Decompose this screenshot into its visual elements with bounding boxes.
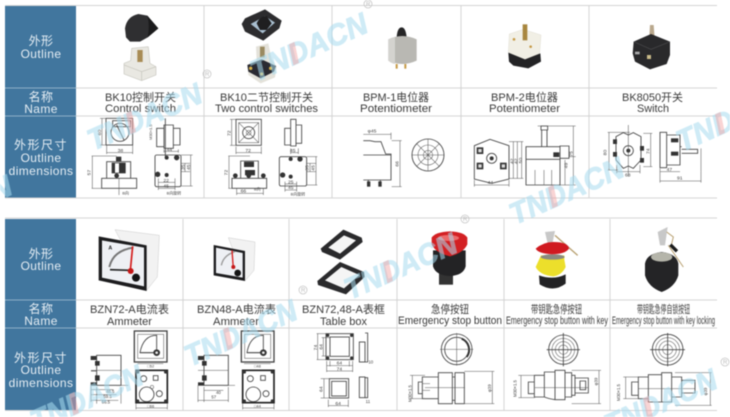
panel: top table	[5, 6, 717, 198]
photo: BK8050 switch	[633, 25, 670, 69]
drawing: BPM-1 potentiometer outline dimensions: 68	[625, 173, 631, 179]
drawing: BZN72-A ammeter outline dimensions: □44	[254, 403, 262, 408]
bottom table header column: 外形	[29, 247, 53, 261]
drawing: BPM-1 potentiometer outline dimensions: 91	[677, 175, 683, 181]
top table header column	[5, 6, 76, 198]
watermark: TNDACN: TNDACN	[245, 7, 374, 88]
watermark: TNDACN: TNDACN	[179, 294, 304, 373]
drawing: BZN72-A ammeter outline dimensions: 64	[318, 344, 324, 350]
registered marks: R	[723, 360, 728, 366]
photo: BZN72-A ammeter: A	[108, 246, 112, 252]
drawing: emergency stop button outline dimensions	[407, 333, 712, 405]
drawing: BK10 control switch outline dimensions: 72	[245, 148, 251, 154]
drawing: BZN72-A ammeter outline dimensions: 74	[313, 345, 319, 350]
top-left products and drawings	[87, 9, 317, 197]
bottom table product names: Ammeter	[213, 316, 259, 328]
photo: BPM-2 potentiometer	[508, 24, 541, 68]
bottom table header column: 名称	[29, 301, 53, 316]
drawing: emergency stop button outline dimensions: φ39	[594, 377, 599, 385]
drawing: BZN72-A ammeter outline dimensions: 48.5	[106, 389, 115, 394]
drawing: BPM-1 potentiometer outline dimensions: 49	[563, 163, 569, 168]
bottom table header column: Outline	[21, 259, 61, 273]
drawing: table box side views, right edge: 10	[368, 360, 374, 365]
top table product names: Potentiometer	[489, 103, 560, 115]
bottom table header column: dimensions	[9, 376, 73, 390]
drawing: BPM-1 potentiometer outline dimensions	[363, 125, 701, 187]
drawing: BK10 control switch outline dimensions: B向旋转	[167, 190, 181, 196]
drawing: BK10 control switch outline dimensions: 25	[288, 180, 294, 186]
drawing: BK10 control switch outline dimensions: 45	[290, 148, 296, 154]
drawing: BZN72-A ammeter outline dimensions: 64	[319, 386, 325, 392]
drawing: BK10 control switch outline dimensions: 22	[163, 178, 169, 184]
bottom table product names: BZN72,48-A表框	[302, 302, 385, 316]
drawing: BK10 control switch outline dimensions: 60	[97, 130, 103, 135]
bottom table product names: Emergency stop button	[398, 315, 502, 327]
top table product names: BK10控制开关	[105, 90, 176, 104]
photo: emergency stop button	[432, 231, 467, 285]
top-right products and drawings	[363, 24, 701, 187]
photo: BZN72-A ammeter	[99, 230, 159, 291]
drawing: BK10 control switch outline dimensions	[87, 118, 317, 197]
drawing: BK10 control switch outline dimensions: 45	[311, 165, 317, 171]
drawing: BZN72-A ammeter outline dimensions: 57	[211, 395, 217, 400]
drawing: BZN72-A ammeter outline dimensions: 64	[337, 361, 342, 367]
drawing: BK10 control switch outline dimensions: B向	[122, 190, 129, 196]
drawing: BZN72,48-A table box outline dimensions	[326, 334, 353, 360]
top table header column: 外形	[29, 34, 53, 48]
photo: emergency stop button with key	[536, 231, 578, 289]
drawing: BK10 control switch outline dimensions: 45	[163, 183, 169, 189]
bottom table product names: Table box	[320, 316, 367, 328]
drawing: BK10 control switch outline dimensions: 72	[227, 130, 233, 136]
bottom table product names: BZN72-A电流表	[90, 302, 169, 316]
watermark: TNDACN: TNDACN	[504, 151, 630, 231]
drawing: BK10 control switch outline dimensions: 66	[241, 189, 246, 195]
drawing: BPM-1 potentiometer outline dimensions: 66	[394, 161, 400, 167]
drawing: emergency stop button outline dimensions: M30×1.5	[407, 384, 412, 402]
top table product names: BK8050开关	[622, 90, 683, 104]
watermark: TNDACN: TNDACN	[82, 77, 208, 157]
drawing: BK10 control switch outline dimensions: 35	[180, 164, 186, 170]
bottom table product names: Emergency stop button with key	[506, 315, 608, 327]
drawing: BPM-1 potentiometer outline dimensions: 47	[667, 167, 672, 173]
drawing: BZN72-A ammeter outline dimensions: □52	[147, 364, 155, 369]
registered marks: R	[301, 288, 306, 294]
drawing: emergency stop button outline dimensions: φ39	[703, 387, 708, 395]
registered marks: R	[463, 217, 468, 223]
photo: BZN72,48-A table box frames	[317, 230, 365, 294]
drawing: BZN72-A ammeter outline dimensions: 66.5	[102, 400, 111, 405]
drawing: BPM-1 potentiometer outline dimensions: 42	[514, 158, 520, 164]
top table header column: Outline	[21, 151, 61, 165]
photo: BK10 control switch	[124, 14, 158, 81]
top table product names	[105, 90, 683, 115]
panel: bottom table	[5, 218, 717, 410]
top table header column: dimensions	[9, 164, 73, 178]
drawing: BZN72-A ammeter outline dimensions: □48	[254, 364, 262, 369]
bottom-left products and drawings	[91, 230, 365, 409]
top table product names: BPM-1电位器	[363, 90, 429, 104]
photo: BZN48-A ammeter	[214, 238, 255, 281]
top table product names: Two control switches	[215, 103, 319, 115]
drawing: BPM-1 potentiometer outline dimensions: φ45	[368, 129, 377, 135]
drawing: BZN72-A ammeter outline dimensions	[91, 331, 365, 409]
drawing: emergency stop button outline dimensions: M30×1.5	[616, 383, 621, 401]
bottom table product names: 带钥匙急停按钮	[531, 302, 582, 316]
photo: BPM-1 potentiometer	[388, 27, 417, 69]
top table header column: 外形尺寸	[14, 138, 68, 152]
top table product names: Potentiometer	[360, 103, 432, 115]
drawing: BK10 control switch outline dimensions: 35	[304, 165, 310, 171]
drawing: BPM-1 potentiometer outline dimensions: 44	[488, 180, 493, 186]
drawing: emergency stop button outline dimensions: M30×1.5	[512, 379, 517, 397]
drawing: BZN72-A ammeter outline dimensions: 40	[216, 390, 221, 395]
top table header column: 名称	[29, 89, 53, 104]
drawing: BK10 control switch outline dimensions: M30×1.5	[148, 124, 153, 140]
top table product names: Control switch	[105, 103, 176, 115]
drawing: BK10 control switch outline dimensions: 44	[167, 147, 172, 153]
drawing: emergency stop button outline dimensions: φ39	[487, 384, 492, 392]
drawing: BPM-1 potentiometer outline dimensions: 42	[509, 158, 515, 164]
photo: emergency stop button with key locking	[645, 227, 683, 292]
drawing: BK10 control switch outline dimensions: 45	[288, 185, 294, 191]
registered marks: R	[366, 2, 371, 8]
drawing: BZN72-A ammeter outline dimensions: □66	[147, 403, 155, 408]
drawing: BK8050 switch outline dimensions	[616, 133, 641, 168]
registered marks: R	[205, 72, 210, 78]
registered marks	[203, 0, 729, 366]
drawing: BPM-1 potentiometer outline dimensions: 80	[603, 150, 609, 155]
photo: BK10 two control switches	[242, 9, 282, 83]
drawing: emergency stop button with key locking outline dimensions	[652, 334, 683, 365]
drawing: BK10 control switch outline dimensions: B向	[254, 186, 261, 192]
drawing: BPM-2 potentiometer outline dimensions	[474, 139, 509, 183]
drawing: BK10 control switch outline dimensions: 57	[87, 170, 93, 175]
drawing: BK10 two control switches outline dimensions	[236, 119, 261, 145]
bottom table product names: 急停按钮	[431, 302, 469, 316]
drawing: BPM-1 potentiometer outline dimensions: 50	[518, 158, 524, 163]
bottom table product names	[90, 302, 715, 328]
drawing: BPM-1 potentiometer outline dimensions: 74	[646, 148, 652, 154]
drawing: BK10 control switch outline dimensions: 72	[223, 170, 229, 175]
bottom table header column: Outline	[21, 363, 61, 377]
drawing: emergency stop button with key outline dimensions	[549, 335, 578, 364]
drawing: table box side views, right edge	[365, 333, 374, 404]
bottom table header column: 外形尺寸	[14, 351, 68, 365]
drawing: BPM-1 potentiometer outline dimensions: 75	[568, 151, 574, 157]
bottom table product names: Ammeter	[107, 316, 152, 328]
drawing: BK10 control switch outline dimensions: B向旋转	[291, 191, 305, 197]
top table header column: Outline	[21, 47, 61, 61]
drawing: table box side views, right edge: 11	[366, 399, 371, 404]
bottom table product names: BZN48-A电流表	[197, 302, 276, 316]
drawing: BK10 control switch outline dimensions: 45	[186, 164, 192, 170]
bottom table header column: Name	[24, 314, 58, 328]
top table product names: BK10二节控制开关	[220, 90, 313, 104]
drawing: BZN72-A ammeter outline dimensions: 59.5	[103, 394, 112, 399]
drawing: BZN72-A ammeter outline dimensions: 64	[335, 401, 341, 407]
watermark: TNDACN: TNDACN	[339, 227, 464, 306]
bottom table header column	[5, 219, 76, 410]
top table product names: Switch	[637, 103, 669, 115]
top table header column: Name	[24, 102, 58, 116]
drawing: BK10 control switch outline dimensions: 38	[118, 148, 123, 154]
top table product names: BPM-2电位器	[491, 90, 558, 104]
drawing: BZN48-A ammeter outline dimensions	[204, 355, 228, 385]
drawing: BZN72-A ammeter outline dimensions: 74	[337, 366, 342, 372]
bottom-right products and drawings	[365, 227, 712, 405]
